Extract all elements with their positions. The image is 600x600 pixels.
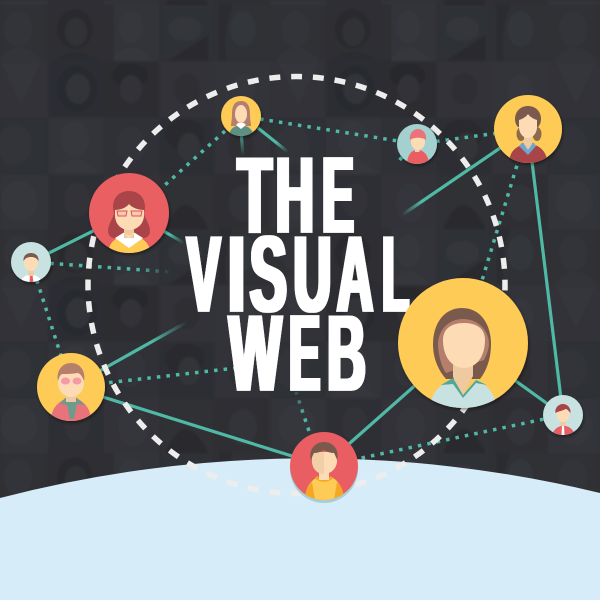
- network: dotted teal connection lines: [31, 116, 563, 466]
- ground: pale blue curved horizon: [0, 458, 600, 600]
- title line: THE: T: [238, 134, 272, 256]
- avatar: boy with yellow shirt: [290, 432, 358, 503]
- title line: WEB: W: [229, 293, 282, 415]
- avatar: man with pink sunglasses: [37, 353, 105, 424]
- title line: VISUAL: A: [337, 214, 373, 336]
- title line: VISUAL: I: [228, 214, 245, 336]
- text: L: [382, 214, 409, 336]
- avatar: man with red tie: [11, 242, 51, 283]
- title line: WEB: E: [289, 293, 320, 415]
- network: solid teal connection lines: [31, 128, 563, 466]
- title: E: [322, 134, 354, 256]
- avatar: small man with red jacket: [543, 395, 583, 436]
- avatar: person with red hair on teal: [397, 124, 437, 165]
- title line: VISUAL: V: [187, 214, 220, 336]
- title: [187, 134, 409, 415]
- avatar: woman with long hair, top: [221, 96, 261, 137]
- title line: VISUAL: S: [250, 214, 287, 336]
- title line: THE: H: [276, 134, 314, 256]
- avatar: woman with pigtails and red jacket: [494, 95, 562, 165]
- title line: VISUAL: U: [294, 214, 331, 336]
- title: B: [327, 293, 366, 415]
- avatar: large woman with brown hair: [398, 278, 528, 408]
- dashed orbit ring: [88, 76, 505, 494]
- avatar: woman with red glasses: [89, 173, 169, 254]
